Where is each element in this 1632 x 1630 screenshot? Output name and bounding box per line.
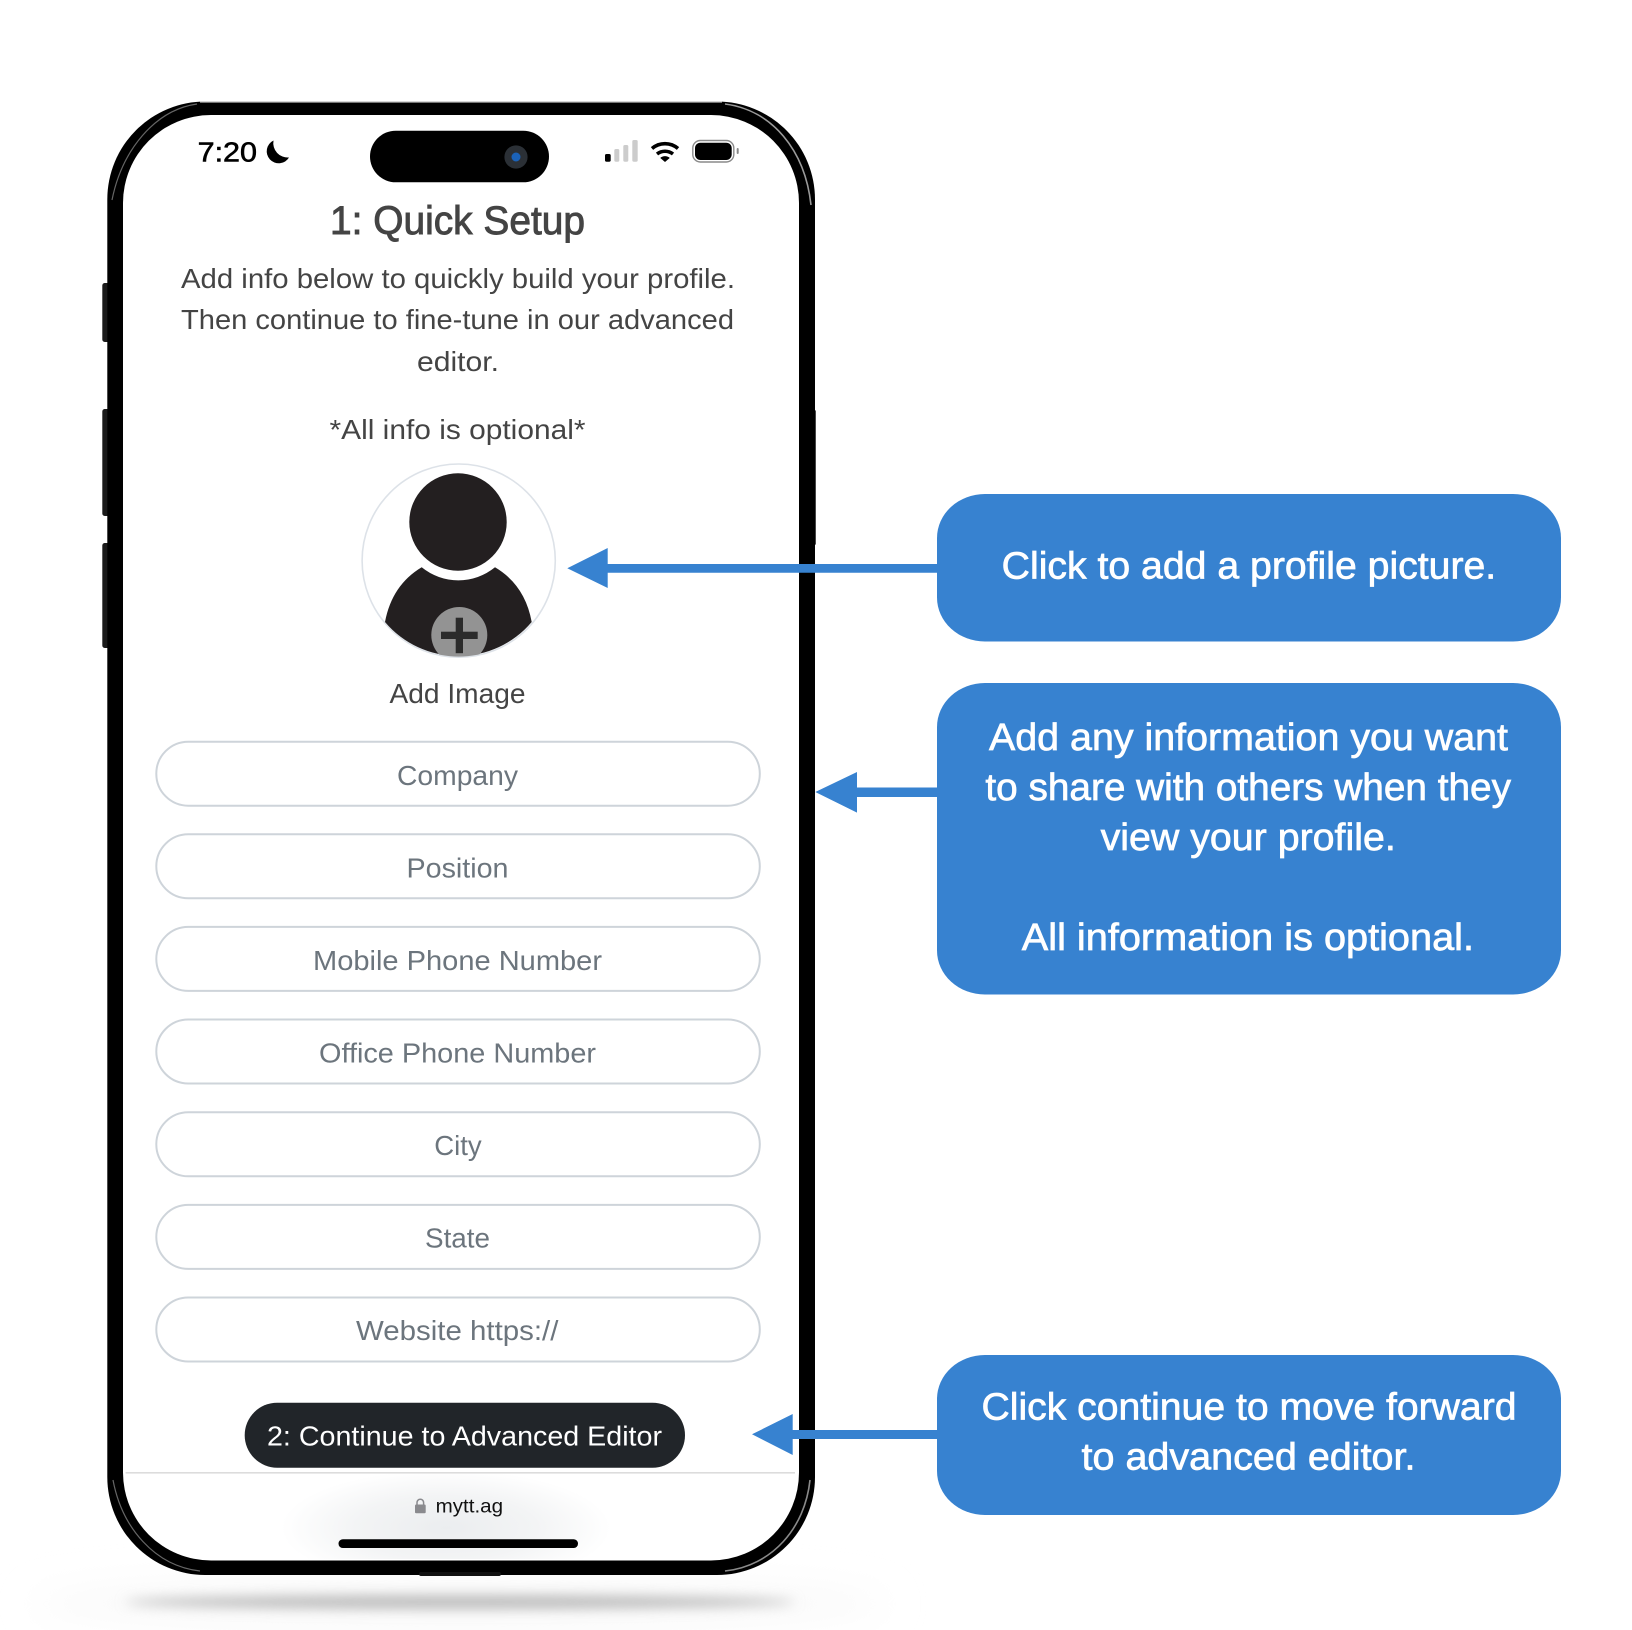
form input: company: Company — [397, 760, 518, 791]
home indicator — [338, 1539, 578, 1548]
arrow: continue — [752, 1414, 940, 1455]
form input: city: City — [434, 1130, 482, 1161]
form input: office phone: Office Phone Number — [319, 1038, 596, 1069]
form input: position — [156, 834, 760, 898]
icon: wifi — [652, 144, 678, 162]
callout: continue — [937, 1355, 1561, 1515]
form input: website — [156, 1298, 760, 1362]
optional note: *All info is optional* — [330, 414, 586, 445]
icon: signal bars — [605, 140, 638, 162]
callout: continue: to advanced editor. — [1082, 1437, 1416, 1479]
url text: mytt.ag — [436, 1497, 503, 1518]
form input: state — [156, 1205, 760, 1269]
phone edge highlights — [112, 102, 811, 1571]
icon: person head — [409, 473, 507, 571]
intro text: Add info below to quickly build your profile. — [181, 263, 735, 294]
form input: city — [156, 1112, 760, 1176]
form input: office phone — [156, 1020, 760, 1084]
callout: add information: to share with others when they — [985, 767, 1511, 809]
callout: add information: All information is optional. — [1022, 917, 1474, 959]
intro text — [181, 263, 735, 377]
callout: add profile picture: Click to add a profile picture. — [1002, 546, 1496, 588]
heading: 1: Quick Setup: 1: Quick Setup — [330, 199, 585, 243]
phone bottom notch — [419, 1572, 501, 1576]
callout: add information: Add any information you want — [989, 717, 1508, 759]
icon: moon — [267, 140, 289, 163]
avatar upload — [362, 464, 555, 663]
continue button — [245, 1403, 685, 1468]
form input: company — [156, 742, 760, 806]
phone side buttons — [102, 283, 816, 648]
form input: mobile phone — [156, 927, 760, 991]
phone body — [107, 102, 815, 1575]
add image label: Add Image — [390, 678, 526, 709]
phone mockup — [102, 102, 816, 1576]
icon: lock — [415, 1499, 426, 1513]
form input: position: Position — [406, 852, 508, 884]
callout: add profile picture — [937, 494, 1561, 642]
icon: add plus — [431, 607, 487, 663]
icon: battery — [693, 140, 739, 162]
form input: website: Website https:// — [356, 1315, 559, 1346]
callout: continue: Click continue to move forward — [982, 1387, 1516, 1429]
browser bar — [126, 1472, 795, 1559]
status time: 7:20 — [198, 137, 257, 168]
form input: mobile phone: Mobile Phone Number — [313, 945, 602, 976]
phone screen — [123, 115, 799, 1560]
intro text: editor. — [417, 346, 499, 377]
icon: person body — [385, 567, 532, 656]
dynamic island with camera — [370, 131, 549, 182]
arrow: information — [815, 772, 940, 813]
callout: add information — [937, 683, 1561, 994]
continue button: 2: Continue to Advanced Editor — [267, 1421, 662, 1452]
form input: state: State — [425, 1223, 490, 1254]
arrow: profile picture — [567, 548, 940, 588]
intro text: Then continue to fine-tune in our advanced — [181, 304, 734, 335]
callout: add information: view your profile. — [1101, 817, 1396, 859]
phone drop shadow — [30, 1578, 890, 1630]
